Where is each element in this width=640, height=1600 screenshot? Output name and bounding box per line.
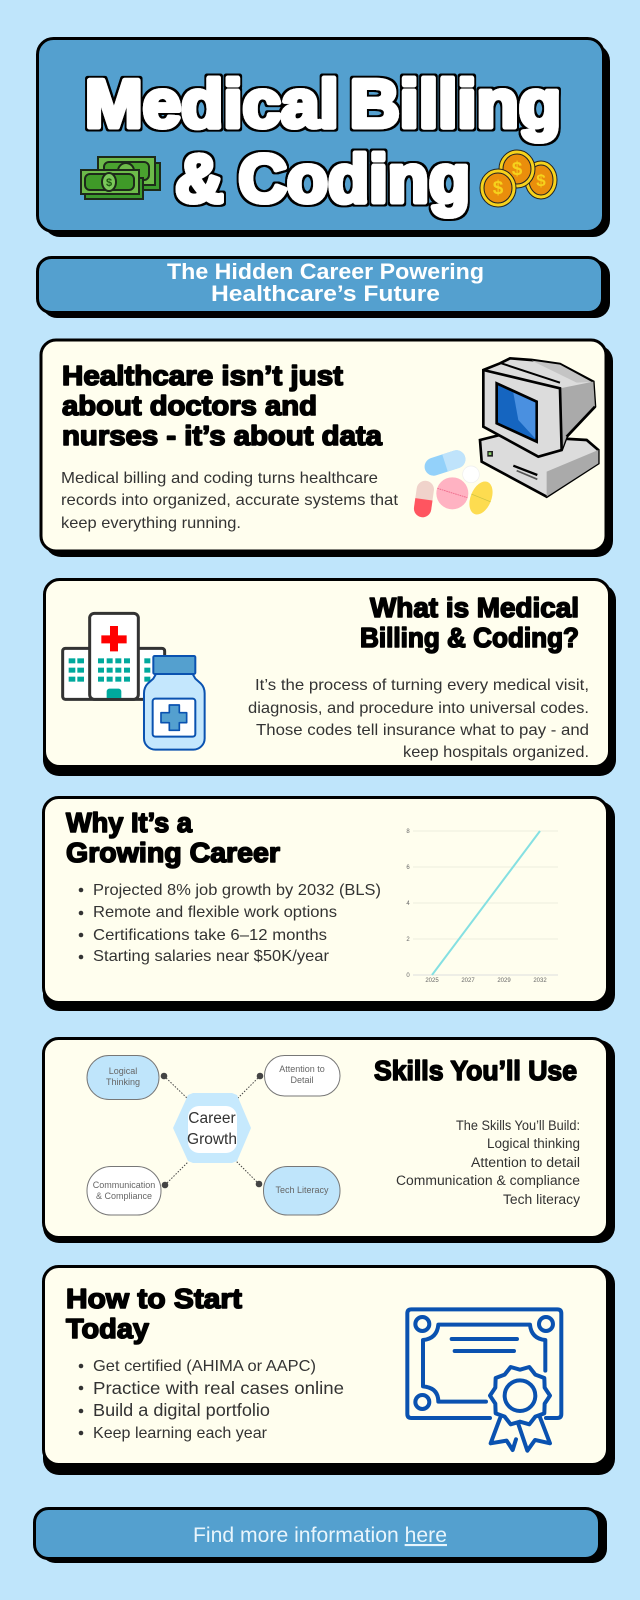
bullet list: Practice with real cases online bbox=[93, 1378, 344, 1398]
heading: Today bbox=[66, 1313, 149, 1344]
bullet list: Remote and flexible work options bbox=[93, 904, 337, 921]
text block: Attention to detail bbox=[471, 1155, 580, 1170]
mind map: Growth bbox=[187, 1131, 237, 1148]
panel: subtitle: Healthcare’s Future bbox=[211, 281, 440, 306]
text block: keep everything running. bbox=[61, 515, 241, 532]
title bbox=[85, 66, 561, 217]
mind map: Thinking bbox=[106, 1077, 140, 1087]
panel: subtitle: The Hidden Career Powering bbox=[167, 259, 484, 284]
text block: It’s the process of turning every medical visit, bbox=[255, 677, 589, 694]
mind map: Tech Literacy bbox=[275, 1185, 329, 1195]
icon: coins bbox=[480, 150, 557, 207]
bullet list: Keep learning each year bbox=[93, 1425, 268, 1442]
panel: skills bbox=[43, 1038, 615, 1243]
icon: coins: $ bbox=[512, 159, 523, 180]
icon: coins: $ bbox=[493, 178, 504, 199]
mind map: Attention to bbox=[279, 1064, 325, 1074]
line chart: 6 bbox=[406, 865, 410, 871]
line chart: 2032 bbox=[533, 978, 547, 984]
heading bbox=[360, 592, 579, 653]
heading: What is Medical bbox=[370, 592, 579, 623]
panel: footer bbox=[34, 1508, 607, 1563]
mind map: Communication bbox=[93, 1180, 155, 1190]
line chart: 2025 bbox=[425, 978, 439, 984]
heading bbox=[66, 807, 280, 868]
heading: Billing & Coding? bbox=[360, 622, 579, 653]
icon: certificate bbox=[407, 1309, 561, 1451]
line chart: 0 bbox=[406, 973, 410, 979]
text block: Tech literacy bbox=[503, 1192, 580, 1207]
panel: growing career bbox=[43, 798, 615, 1011]
mind map: & Compliance bbox=[96, 1191, 152, 1201]
line chart: 2029 bbox=[497, 978, 511, 984]
heading bbox=[66, 1283, 242, 1344]
line chart: 2 bbox=[406, 937, 410, 943]
bullet list bbox=[79, 1358, 344, 1442]
text block: records into organized, accurate systems that bbox=[61, 492, 399, 509]
bullet list: Certifications take 6–12 months bbox=[93, 927, 327, 944]
bullet list bbox=[79, 882, 381, 965]
panel: header bbox=[38, 38, 610, 237]
bullet list: Get certified (AHIMA or AAPC) bbox=[93, 1358, 316, 1375]
line chart: 2027 bbox=[461, 978, 475, 984]
panel: subtitle bbox=[38, 258, 610, 318]
title: Medical Billing bbox=[85, 66, 561, 142]
line chart: 4 bbox=[406, 901, 410, 907]
text block: keep hospitals organized. bbox=[403, 744, 589, 761]
bullet list: Build a digital portfolio bbox=[93, 1400, 270, 1420]
panel: how to start bbox=[43, 1266, 615, 1475]
text block: Those codes tell insurance what to pay - and bbox=[256, 722, 589, 739]
line chart bbox=[406, 829, 558, 984]
text block: Logical thinking bbox=[487, 1136, 580, 1151]
panel: intro bbox=[41, 340, 613, 557]
heading: Skills You’ll Use bbox=[374, 1055, 577, 1086]
heading: nurses - it’s about data bbox=[62, 420, 382, 451]
text block: Communication & compliance bbox=[396, 1173, 580, 1188]
line chart: 8 bbox=[406, 829, 410, 835]
icon: money bbox=[81, 157, 160, 199]
heading: about doctors and bbox=[62, 390, 317, 421]
heading: Growing Career bbox=[66, 837, 280, 868]
text block bbox=[396, 1118, 580, 1207]
bullet list: Starting salaries near $50K/year bbox=[93, 948, 330, 965]
mind map: Career bbox=[188, 1110, 236, 1127]
text block: diagnosis, and procedure into universal codes. bbox=[248, 700, 589, 717]
icon: coins: $ bbox=[536, 171, 546, 190]
mind map bbox=[87, 1056, 340, 1215]
heading: Healthcare isn’t just bbox=[62, 360, 343, 391]
text block: The Skills You’ll Build: bbox=[456, 1118, 580, 1133]
panel: footer: Find more information here bbox=[193, 1524, 447, 1547]
text block bbox=[248, 677, 589, 761]
icon: hospital and bottle bbox=[63, 613, 205, 750]
heading: Why It’s a bbox=[66, 807, 192, 838]
bullet list: Projected 8% job growth by 2032 (BLS) bbox=[93, 882, 381, 899]
mind map: Logical bbox=[109, 1066, 137, 1076]
text block: Medical billing and coding turns healthcare bbox=[61, 470, 378, 487]
icon: money: $ bbox=[106, 177, 112, 189]
icon: computer and pills bbox=[413, 358, 598, 518]
heading: How to Start bbox=[66, 1283, 242, 1314]
title: & Coding bbox=[175, 141, 470, 217]
heading bbox=[62, 360, 382, 451]
mind map: Detail bbox=[290, 1075, 314, 1085]
text block bbox=[61, 470, 399, 532]
panel: what is bbox=[43, 580, 616, 776]
